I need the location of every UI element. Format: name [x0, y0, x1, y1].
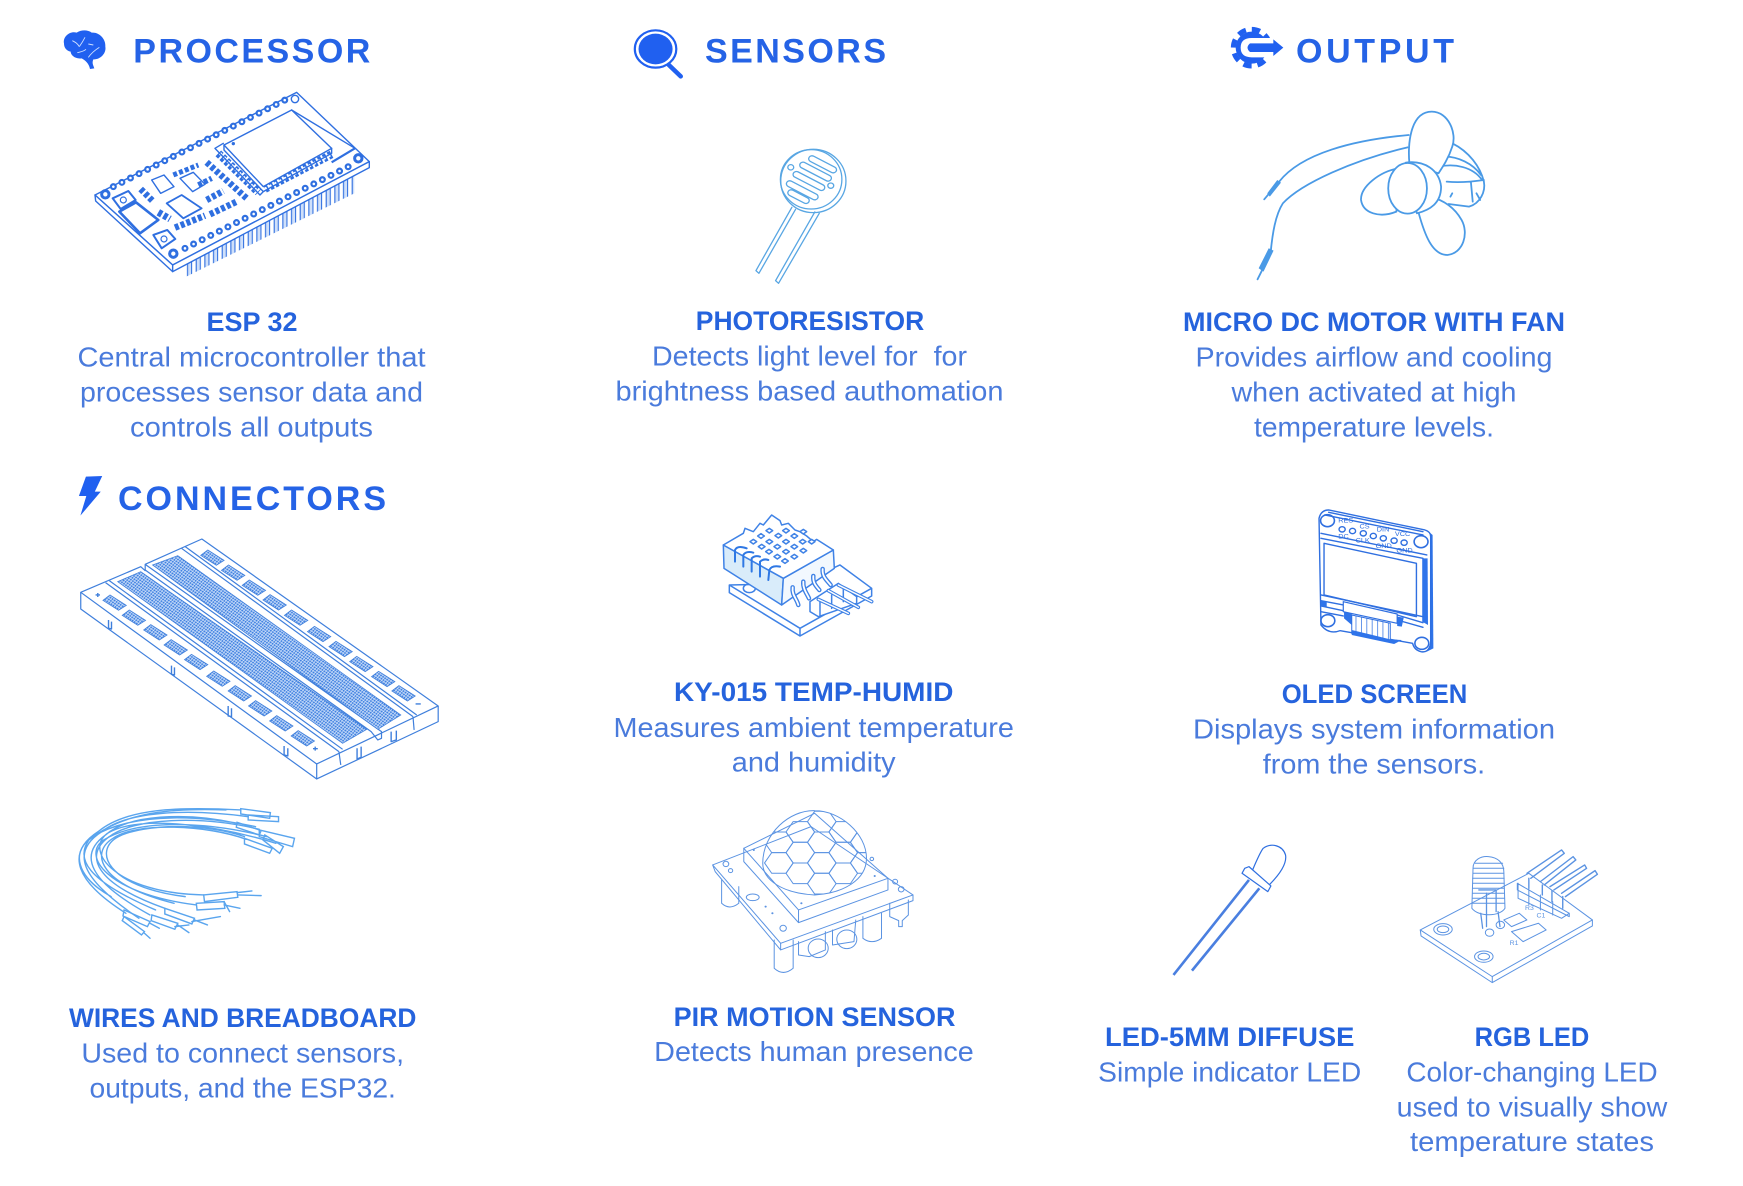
illustration: OLED module: GND [1376, 543, 1392, 550]
pins [184, 172, 354, 278]
illustration: OLED module: RES [1338, 518, 1354, 525]
illustration: OLED module: DIN [1377, 527, 1389, 534]
title: RGB LED: RGB LED [1475, 1022, 1589, 1052]
description: KY-015: Measures ambient temperature [614, 712, 1014, 743]
description: ESP 32 [78, 342, 426, 443]
title: WIRES AND BREADBOARD: WIRES AND BREADBOARD [69, 1003, 416, 1033]
description: wires: outputs, and the ESP32. [90, 1072, 396, 1103]
panel: RGB LED [1397, 850, 1667, 1157]
illustration: OLED module: VCC [1395, 531, 1410, 538]
description: RGB LED: Color-changing LED [1406, 1057, 1658, 1088]
description: OLED: from the sensors. [1263, 748, 1485, 779]
description: ESP 32: processes sensor data and [80, 377, 423, 408]
description: LED: Simple indicator LED [1098, 1057, 1361, 1088]
panel: connectors [69, 476, 438, 1103]
title: PHOTORESISTOR: PHOTORESISTOR [696, 306, 924, 336]
illustration: temperature humidity module [723, 515, 872, 636]
description: motor: Provides airflow and cooling [1196, 342, 1552, 373]
icon: lightning bolt [79, 476, 102, 516]
illustration: ESP32 board [95, 92, 369, 278]
panel: processor [64, 30, 426, 443]
description: photoresistor [616, 341, 1004, 406]
illustration: RGB LED module: R1 [1510, 940, 1519, 947]
description: wires: Used to connect sensors, [81, 1038, 404, 1069]
heading: PROCESSOR: PROCESSOR [133, 32, 370, 70]
description: KY-015: and humidity [732, 747, 896, 778]
illustration: breadboard [81, 539, 438, 779]
panel: PIR motion sensor [654, 811, 974, 1067]
title: ESP 32: ESP 32 [206, 307, 298, 337]
illustration: PIR sensor [713, 811, 913, 972]
illustration: RGB LED module [1420, 850, 1597, 983]
description: motor: temperature levels. [1254, 412, 1494, 443]
icon: brain [64, 30, 105, 69]
panel: output heading [1233, 23, 1454, 72]
title: KY-015 TEMP-HUMID: KY-015 TEMP-HUMID [674, 677, 953, 707]
illustration: RGB LED module: C1 [1537, 913, 1546, 919]
panel: KY-015 temp-humid [614, 515, 1014, 778]
description: motor: when activated at high [1230, 377, 1516, 408]
description: RGB LED: temperature states [1410, 1126, 1654, 1157]
description: PIR: Detects human presence [654, 1036, 974, 1067]
illustration: photoresistor [756, 149, 846, 283]
description: OLED: Displays system information [1193, 713, 1555, 744]
description: photoresistor: Detects light level for for [652, 341, 967, 372]
title: LED-5MM DIFFUSE: LED-5MM DIFFUSE [1105, 1022, 1354, 1052]
title: OLED SCREEN: OLED SCREEN [1282, 679, 1467, 709]
panel: OLED screen [1193, 510, 1555, 779]
description: OLED [1193, 713, 1555, 779]
icon: gear with arrow [1233, 23, 1283, 72]
illustration: fan [1258, 112, 1484, 279]
description: ESP 32: controls all outputs [130, 412, 373, 443]
illustration: OLED module: GND [1396, 548, 1413, 555]
description: photoresistor: brightness based authomation [616, 376, 1004, 406]
illustration: LED [1173, 845, 1286, 975]
description: wires [81, 1038, 404, 1103]
illustration: jumper wires [79, 809, 294, 938]
title: PIR MOTION SENSOR: PIR MOTION SENSOR [674, 1002, 956, 1032]
illustration: OLED module: CLK [1356, 538, 1370, 545]
heading: CONNECTORS: CONNECTORS [118, 480, 386, 518]
panel: LED 5mm diffuse [1098, 845, 1361, 1088]
illustration: OLED module [1319, 510, 1433, 652]
title: MICRO DC MOTOR WITH FAN: MICRO DC MOTOR WITH FAN [1183, 307, 1565, 337]
illustration: RGB LED module: R3 [1525, 905, 1534, 912]
description: KY-015 [614, 712, 1014, 778]
description: RGB LED: used to visually show [1397, 1092, 1667, 1123]
heading: SENSORS: SENSORS [705, 32, 886, 70]
description: motor [1196, 342, 1552, 443]
panel: micro DC motor with fan [1183, 112, 1565, 443]
description: RGB LED [1397, 1057, 1667, 1157]
illustration: OLED module: DC [1338, 534, 1349, 541]
illustration: OLED module: CS [1359, 524, 1370, 530]
heading: OUTPUT: OUTPUT [1296, 32, 1454, 70]
description: ESP 32: Central microcontroller that [78, 342, 426, 373]
panel: sensors heading [635, 30, 886, 76]
icon: magnifier [635, 30, 681, 76]
panel: photoresistor [616, 149, 1004, 406]
